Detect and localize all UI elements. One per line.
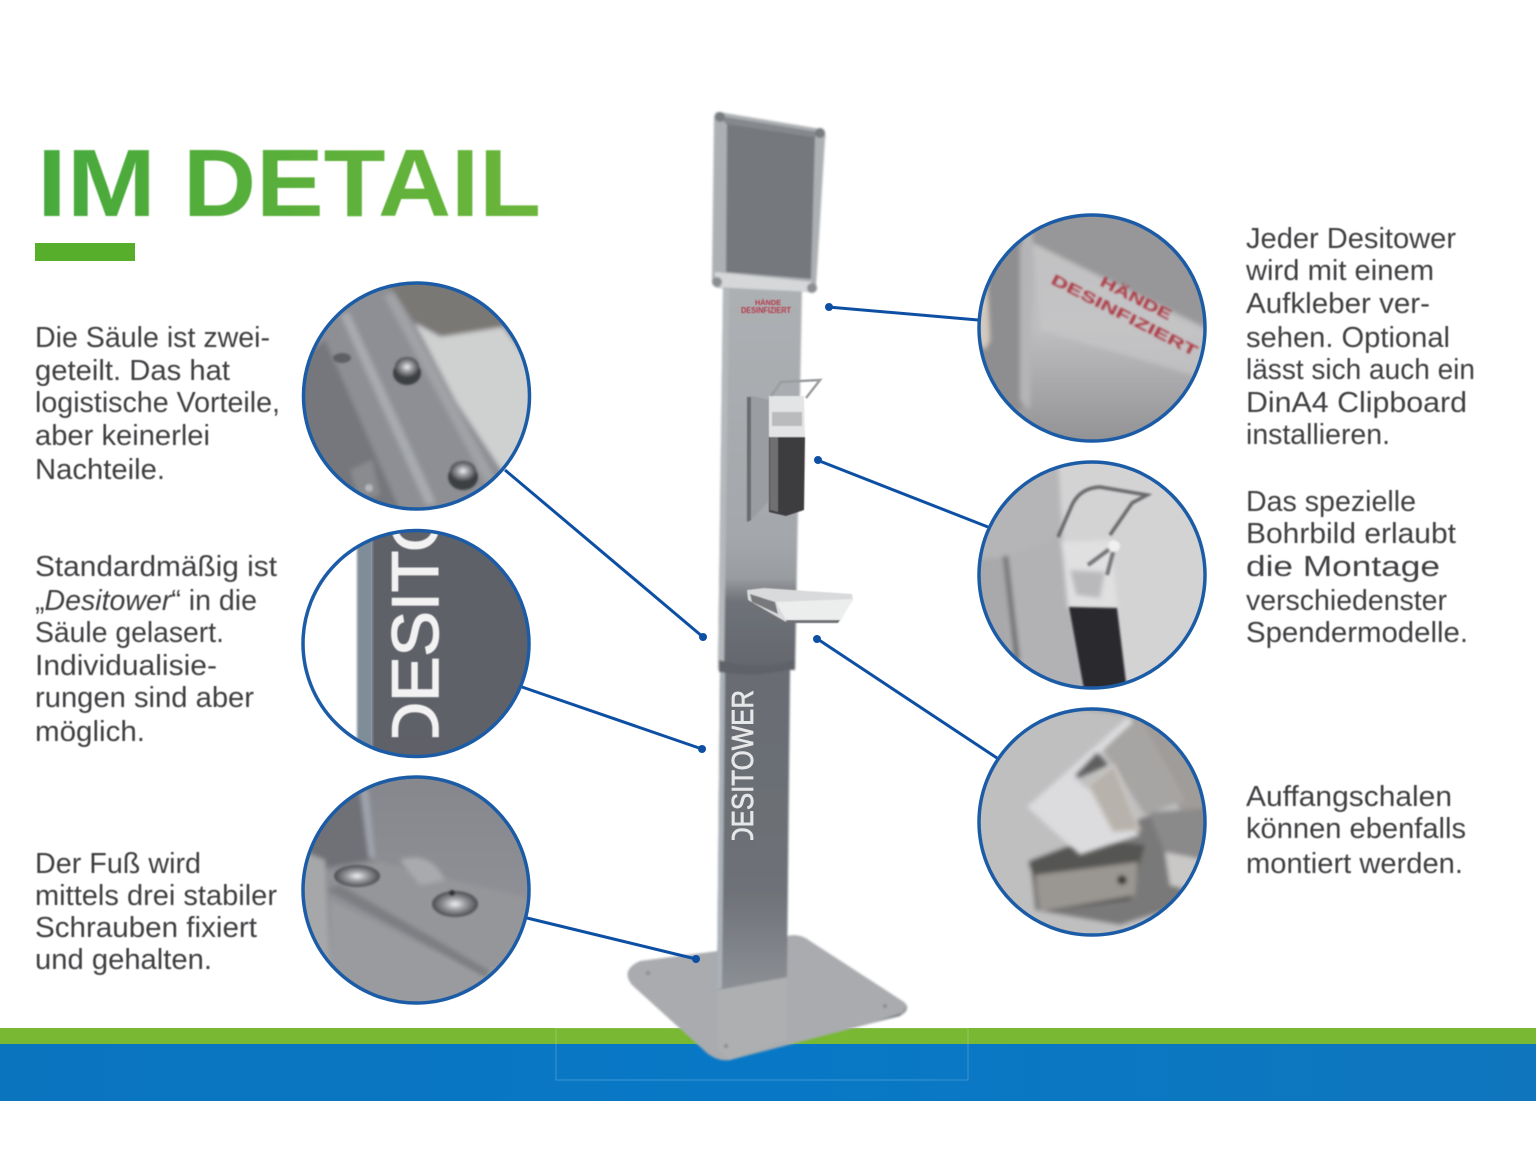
text block: drip trays: können ebenfalls: [1246, 813, 1466, 845]
text block: column two-part: [35, 322, 280, 486]
connector: engraving: [522, 687, 706, 753]
sticker: HÄNDE: [755, 299, 781, 307]
text block: drip trays: [1246, 781, 1466, 880]
text block: drip trays: Auffangschalen: [1246, 781, 1452, 813]
sticker: DESINFIZIERT: [741, 306, 791, 315]
detail circle: screws on column joint: [300, 280, 535, 515]
text block: drip trays: montiert werden.: [1246, 848, 1463, 880]
detail circle: sticker: HÄNDE: [1097, 273, 1174, 324]
drip tray: [747, 588, 853, 623]
text block: laser engraving: rungen sind aber: [35, 682, 254, 714]
text block: drilling pattern: Spendermodelle.: [1246, 617, 1468, 649]
text block: laser engraving: „Desitower“ in die: [35, 585, 257, 617]
text block: drilling pattern: die Montage: [1246, 551, 1440, 583]
connector: dispenser: [814, 456, 988, 527]
text block: foot screws: Der Fuß wird: [35, 848, 201, 880]
poster frame: [712, 112, 826, 293]
text block: foot screws: und gehalten.: [35, 944, 212, 976]
text block: column two-part: logistische Vorteile,: [35, 387, 280, 419]
engraved brand: DESITOWER: [725, 690, 760, 846]
product: Desitower stand: [628, 112, 908, 1060]
text block: laser engraving: Standardmäßig ist: [35, 551, 277, 583]
text block: sticker: [1245, 223, 1475, 451]
detail circle: laser engraving: DESITO: [378, 499, 452, 751]
connector: tray: [813, 635, 997, 758]
soap dispenser: [746, 380, 820, 522]
column: [717, 286, 802, 990]
connector: column split: [505, 470, 707, 641]
sticker: [741, 299, 791, 315]
text block: column two-part: Nachteile.: [35, 454, 165, 486]
text block: sticker: lässt sich auch ein: [1246, 354, 1475, 386]
text block: sticker: wird mit einem: [1245, 255, 1434, 287]
text block: sticker: Aufkleber ver-: [1246, 288, 1430, 320]
title: DETAIL: [183, 130, 541, 237]
text block: sticker: installieren.: [1246, 419, 1390, 451]
connector: sticker: [825, 303, 978, 320]
text block: foot screws: Schrauben fixiert: [35, 912, 257, 944]
text block: laser engraving: [35, 551, 277, 748]
text block: sticker: Jeder Desitower: [1246, 223, 1456, 255]
text block: drilling pattern: [1246, 486, 1468, 649]
text block: drilling pattern: Das spezielle: [1246, 486, 1416, 518]
connector: foot: [527, 918, 700, 963]
text block: foot screws: mittels drei stabiler: [35, 880, 277, 912]
detail circle: dispenser: [975, 458, 1210, 693]
text block: column two-part: aber keinerlei: [35, 420, 210, 452]
text block: sticker: DinA4 Clipboard: [1246, 387, 1467, 419]
text block: column two-part: geteilt. Das hat: [35, 355, 230, 387]
detail circle: sticker: DESINFIZIERT: [1048, 271, 1200, 360]
text block: drilling pattern: Bohrbild erlaubt: [1246, 518, 1456, 550]
detail circle: laser engraving: [301, 528, 531, 758]
detail circle: foot screws: [300, 775, 535, 1010]
title: IM: [37, 130, 156, 237]
title: [37, 130, 541, 237]
detail circle: drip tray: [975, 705, 1210, 940]
text block: foot screws: [35, 848, 277, 976]
text block: laser engraving: Individualisie-: [35, 650, 217, 682]
detail circle: sticker: [975, 212, 1210, 444]
text block: drilling pattern: verschiedenster: [1246, 585, 1447, 617]
base plate: [628, 935, 908, 1060]
footer band: [0, 1028, 1536, 1101]
title accent bar: [35, 243, 135, 261]
text block: sticker: sehen. Optional: [1246, 322, 1450, 354]
text block: laser engraving: Säule gelasert.: [35, 617, 224, 649]
text block: column two-part: Die Säule ist zwei-: [35, 322, 270, 354]
text block: laser engraving: möglich.: [35, 716, 145, 748]
